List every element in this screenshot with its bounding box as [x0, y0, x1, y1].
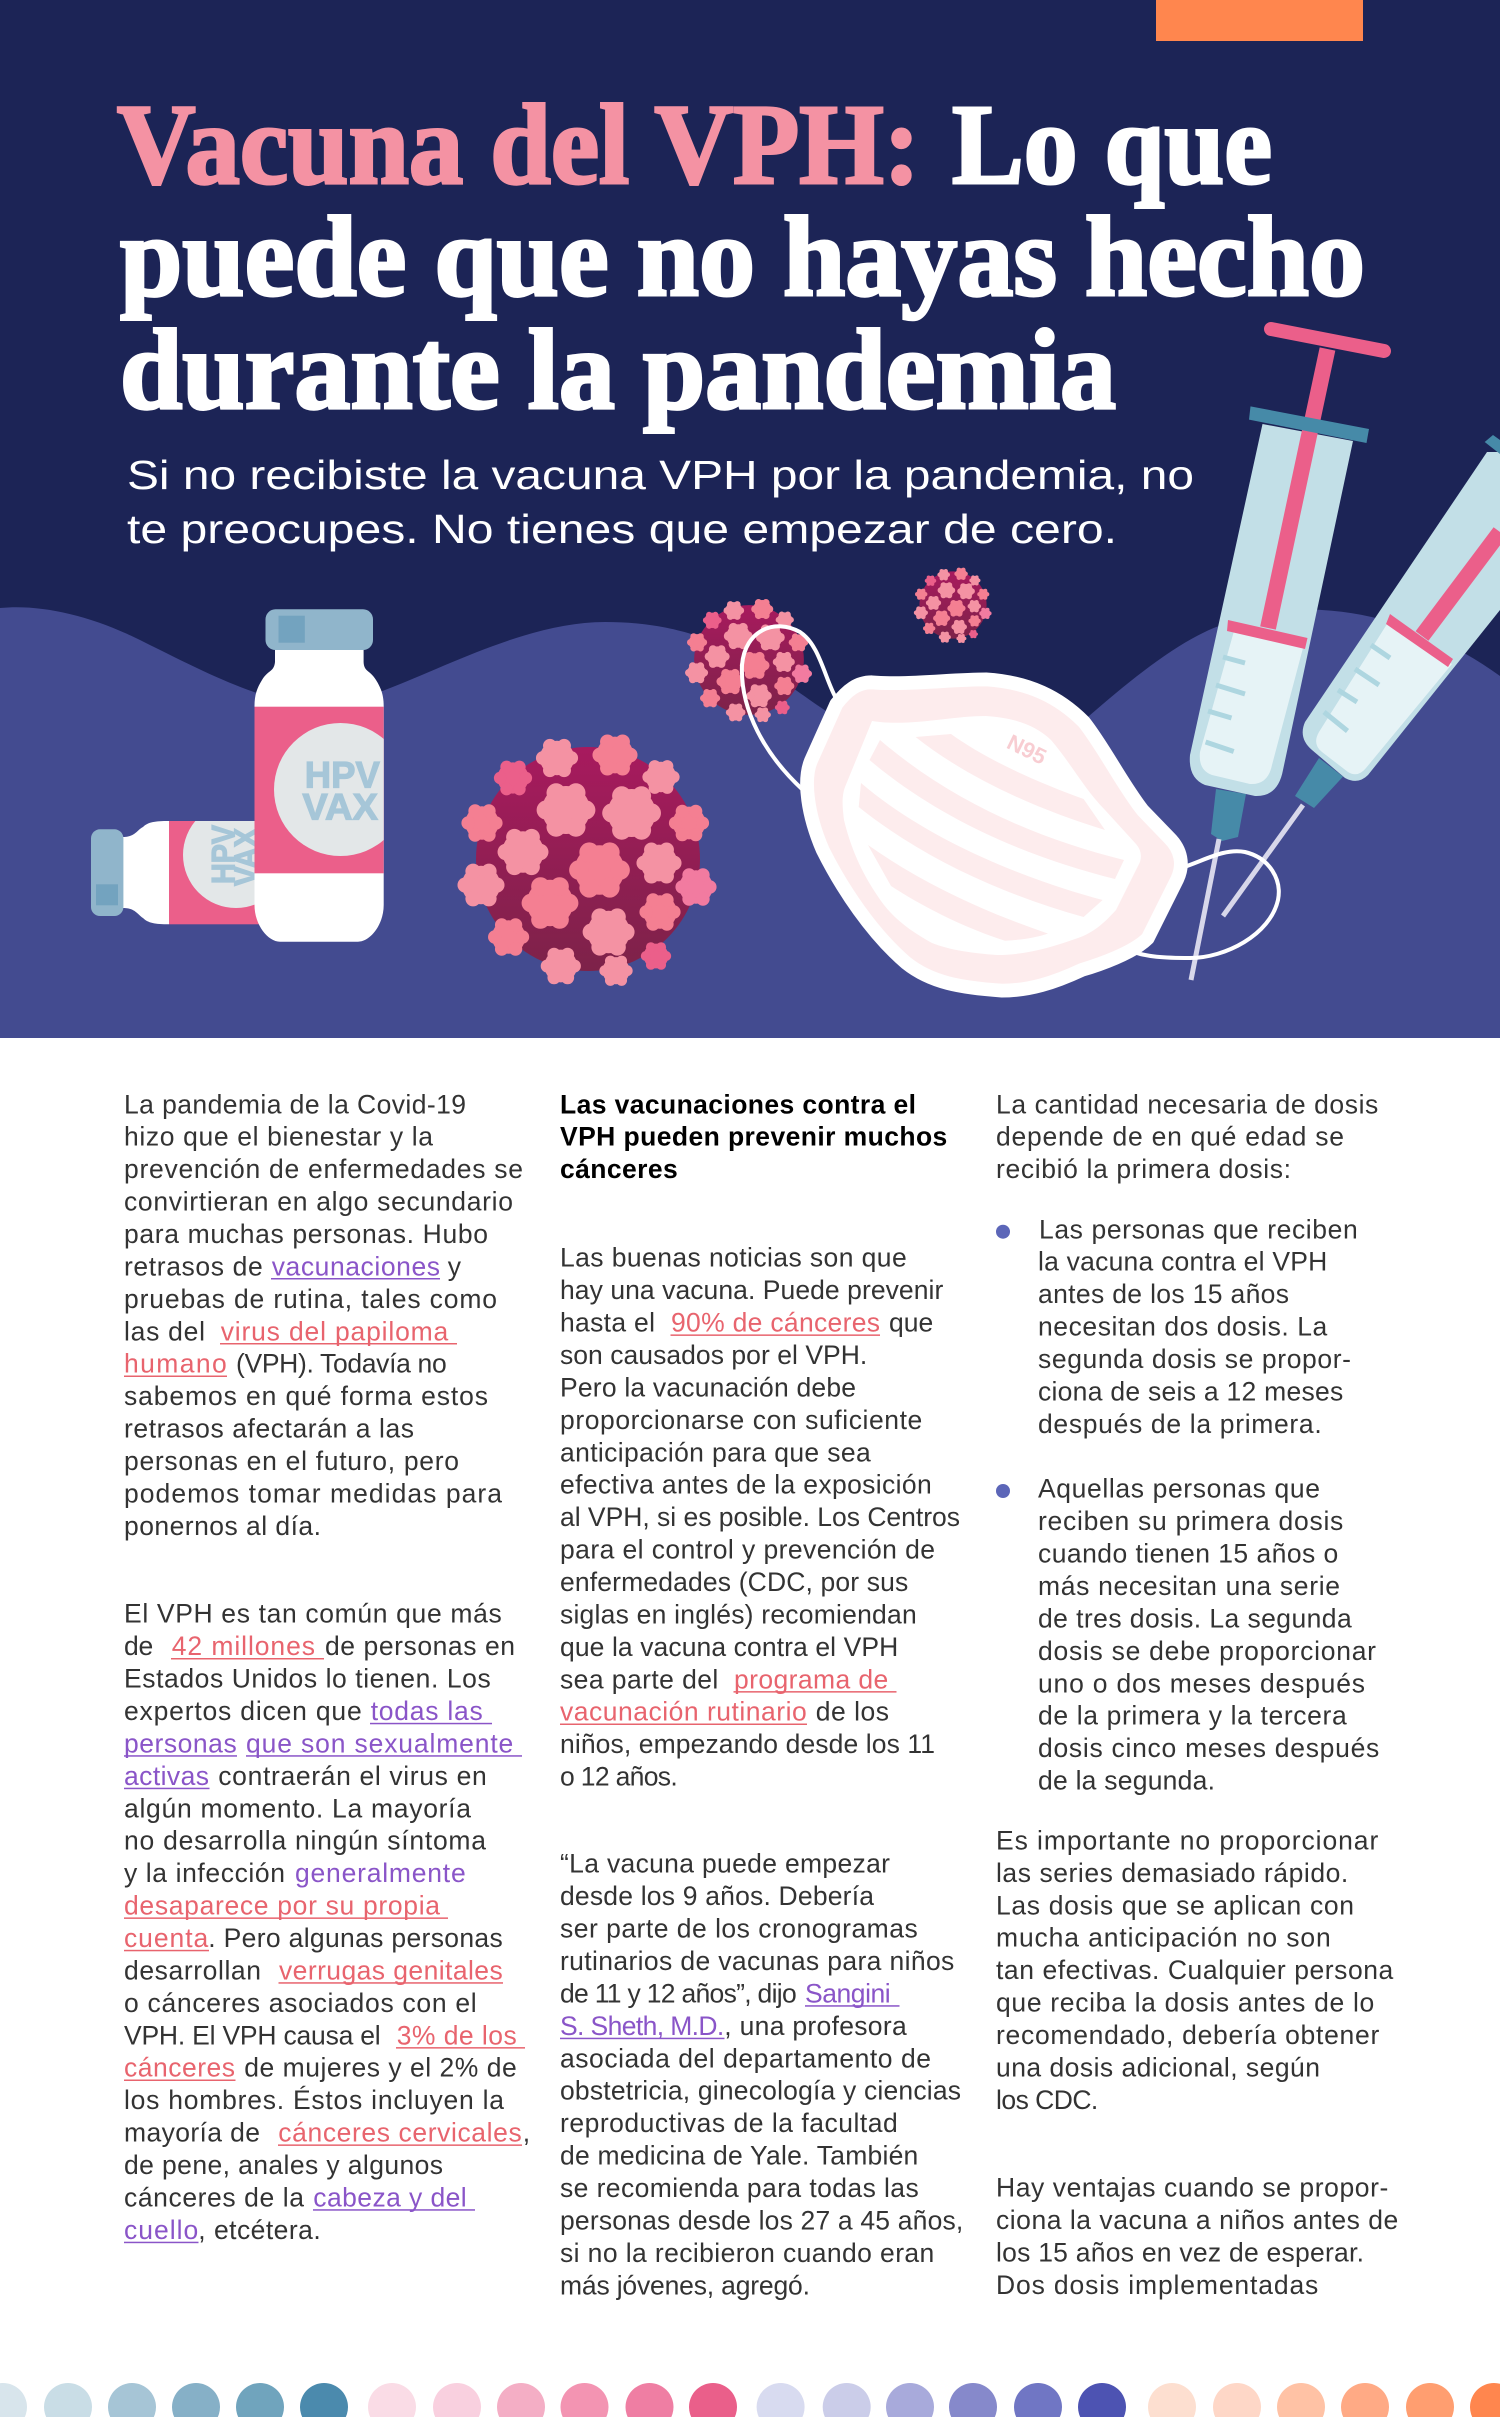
text block: column two good news: efectiva antes de la exposición [560, 1470, 932, 1500]
bullet: under 15 years: segunda dosis se propor- [1038, 1344, 1351, 1374]
text block: column two quote: reproductivas de la facultad [560, 2108, 898, 2138]
text block: column one intro: personas en el futuro, pero [124, 1446, 459, 1476]
text block: column three intro [996, 1089, 1378, 1184]
icon: small virus [914, 568, 992, 643]
text block: column two good news: o 12 años. [560, 1762, 678, 1792]
text block: column two good news: vacunación rutinario [560, 1697, 807, 1727]
text block: column three intro: La cantidad necesaria de dosis [996, 1089, 1378, 1119]
text block: column two good news: son causados por el VPH. [560, 1340, 867, 1370]
text block: column two good news: sea parte del [560, 1664, 718, 1694]
text block: column one VPH prevalence: expertos dicen que [124, 1696, 362, 1726]
text block: column two good news: enfermedades (CDC, por sus [560, 1567, 908, 1597]
text block: column two good news: al VPH, si es posible. Los Centros [560, 1502, 960, 1532]
text block: column two good news: Las buenas noticias son que [560, 1243, 907, 1273]
text block: column three advantages: Hay ventajas cuando se propor- [996, 2173, 1388, 2203]
text block: column two quote: de medicina de Yale. También [560, 2141, 918, 2171]
title: Lo que [952, 81, 1272, 208]
text block: column two quote: Sangini [805, 1978, 891, 2008]
bullet: 15 years or older: uno o dos meses después [1038, 1668, 1365, 1698]
text block: column three timing: una dosis adicional, según [996, 2052, 1320, 2082]
text block: column one VPH prevalence: mayoría de [124, 2118, 260, 2148]
title [117, 81, 1365, 433]
text block: column one VPH prevalence: cuello [124, 2215, 198, 2245]
bullet: 15 years or older: de tres dosis. La segunda [1038, 1603, 1352, 1633]
text block: column two good news: niños, empezando desde los 11 [560, 1729, 935, 1759]
text block: column one VPH prevalence: y la infección [124, 1858, 285, 1888]
text block: column two quote: se recomienda para todas las [560, 2173, 919, 2203]
heading: column two [560, 1089, 947, 1184]
text block: column one intro: La pandemia de la Covid-19 [124, 1089, 466, 1119]
bullet: under 15 years [996, 1214, 1358, 1439]
text block: column three intro: recibió la primera dosis: [996, 1154, 1291, 1184]
text block: column two quote: obstetricia, ginecología y ciencias [560, 2076, 961, 2106]
text block: column one intro: y [448, 1252, 462, 1282]
text block: column one intro: ponernos al día. [124, 1511, 321, 1541]
text block: column three timing: tan efectivas. Cualquier persona [996, 1955, 1394, 1985]
bullet: 15 years or older: dosis se debe proporcionar [1038, 1636, 1376, 1666]
icon: medium virus [685, 599, 812, 722]
text block: column three advantages [996, 2173, 1398, 2300]
heading: column two: Las vacunaciones contra el [560, 1089, 916, 1119]
subtitle [127, 452, 1194, 552]
text block: column one intro: retrasos de [124, 1252, 263, 1282]
subtitle: te preocupes. No tienes que empezar de cero. [127, 506, 1117, 552]
text block: column three timing: las series demasiado rápido. [996, 1858, 1348, 1888]
text block: column one VPH prevalence: los hombres. Éstos incluyen la [124, 2085, 504, 2115]
text block: column two good news: anticipación para que sea [560, 1437, 871, 1467]
text block: column three timing: mucha anticipación no son [996, 1923, 1331, 1953]
title: puede que no hayas hecho [120, 193, 1365, 320]
icon: N95 mask [742, 626, 1279, 991]
text block: column one VPH prevalence: que son sexualmente [246, 1728, 513, 1758]
text block: column one VPH prevalence: no desarrolla ningún síntoma [124, 1826, 486, 1856]
bullet: under 15 years: necesitan dos dosis. La [1038, 1312, 1328, 1342]
text block: column one VPH prevalence: verrugas genitales [279, 1955, 503, 1985]
text block: column two quote: desde los 9 años. Debería [560, 1881, 874, 1911]
text block: column two quote: asociada del departamento de [560, 2043, 931, 2073]
text block: column two good news: que la vacuna contra el VPH [560, 1632, 898, 1662]
text block: column one intro: vacunaciones [272, 1252, 440, 1282]
icon: large vial [254, 609, 384, 942]
bullet: 15 years or older: más necesitan una serie [1038, 1571, 1340, 1601]
text block: column three timing: Es importante no proporcionar [996, 1825, 1378, 1855]
text block: column one VPH prevalence: . Pero algunas personas [208, 1923, 503, 1953]
text block: column two good news: hasta el [560, 1308, 655, 1338]
bullet: under 15 years: Las personas que reciben [1039, 1214, 1358, 1244]
text block: column one VPH prevalence: VPH. El VPH causa el [124, 2020, 381, 2050]
text block: column one VPH prevalence: todas las [371, 1696, 483, 1726]
text block: column one intro: humano [124, 1349, 227, 1379]
icon: small vial lying down: HPV [206, 824, 242, 884]
hero panel background [0, 0, 1500, 1038]
orange tab [1156, 0, 1363, 41]
text block: column one VPH prevalence: cánceres de la [124, 2182, 304, 2212]
subtitle: Si no recibiste la vacuna VPH por la pandemia, no [127, 452, 1194, 498]
text block: column two good news: 90% de cánceres [671, 1308, 880, 1338]
text block: column two quote: S. Sheth, M.D. [560, 2011, 724, 2041]
text block: column one VPH prevalence: 3% de los [397, 2020, 517, 2050]
text block: column one VPH prevalence: activas [124, 1761, 209, 1791]
bullet: 15 years or older: reciben su primera dosis [1038, 1506, 1343, 1536]
text block: column one intro: virus del papiloma [221, 1316, 449, 1346]
text block: column one VPH prevalence: de pene, anales y algunos [124, 2150, 443, 2180]
text block: column two quote: “La vacuna puede empezar [560, 1849, 890, 1879]
icon: large vial: VAX [302, 786, 378, 827]
text block: column two good news: que [889, 1308, 933, 1338]
text block: column three advantages: ciona la vacuna a niños antes de [996, 2205, 1398, 2235]
text block: column one intro: sabemos en qué forma estos [124, 1381, 488, 1411]
text block: column three timing: recomendado, debería obtener [996, 2020, 1379, 2050]
text block: column one intro [124, 1089, 523, 1541]
icon: N95 mask: N95 [1003, 729, 1050, 770]
bullet: 15 years or older: de la primera y la tercera [1038, 1701, 1347, 1731]
text block: column two quote: personas desde los 27 a 45 años, [560, 2205, 963, 2235]
text block: column two good news [560, 1243, 960, 1792]
bottom colour dots [0, 2383, 1500, 2417]
text block: column one VPH prevalence [124, 1599, 530, 2245]
text block: column one VPH prevalence: desarrollan [124, 1955, 261, 1985]
text block: column two good news: Pero la vacunación debe [560, 1372, 856, 1402]
text block: column three timing: Las dosis que se aplican con [996, 1890, 1354, 1920]
text block: column two good news: programa de [734, 1664, 888, 1694]
heading: column two: cánceres [560, 1154, 678, 1184]
text block: column one VPH prevalence: cánceres cervicales [278, 2118, 522, 2148]
text block: column two quote: ser parte de los cronogramas [560, 1914, 918, 1944]
text block: column one intro: convirtieran en algo secundario [124, 1187, 513, 1217]
bullet: under 15 years: la vacuna contra el VPH [1038, 1247, 1327, 1277]
text block: column two quote: , una profesora [724, 2011, 907, 2041]
text block: column one VPH prevalence: de [124, 1631, 153, 1661]
text block: column one VPH prevalence: contraerán el virus en [218, 1761, 487, 1791]
text block: column one intro: (VPH). Todavía no [236, 1349, 447, 1379]
text block: column two quote [560, 1849, 963, 2300]
text block: column two quote: de 11 y 12 años”, dijo [560, 1978, 797, 2008]
text block: column three advantages: los 15 años en vez de esperar. [996, 2238, 1364, 2268]
title: Vacuna del VPH: [117, 81, 920, 208]
icon: syringe two [1223, 435, 1500, 916]
icon: small vial lying down [91, 821, 259, 924]
text block: column two quote: más jóvenes, agregó. [560, 2270, 810, 2300]
bullet: 15 years or older [996, 1474, 1379, 1796]
heading: column two: VPH pueden prevenir muchos [560, 1122, 947, 1152]
text block: column one intro: pruebas de rutina, tales como [124, 1284, 497, 1314]
text block: column one VPH prevalence: personas [124, 1728, 237, 1758]
text block: column two quote: rutinarios de vacunas para niños [560, 1946, 954, 1976]
text block: column one VPH prevalence: cánceres [124, 2053, 235, 2083]
text block: column three intro: depende de en qué edad se [996, 1122, 1344, 1152]
text block: column two good news: siglas en inglés) recomiendan [560, 1599, 917, 1629]
bullet: 15 years or older: de la segunda. [1038, 1766, 1215, 1796]
text block: column one VPH prevalence: cabeza y del [313, 2182, 467, 2212]
text block: column one intro: para muchas personas. Hubo [124, 1219, 488, 1249]
bullet: under 15 years: ciona de seis a 12 meses [1038, 1376, 1343, 1406]
text block: column one VPH prevalence: 42 millones [172, 1631, 315, 1661]
icon: syringe one [1190, 329, 1384, 980]
text block: column one VPH prevalence: de mujeres y el 2% de [244, 2053, 517, 2083]
text block: column one VPH prevalence: generalmente [295, 1858, 466, 1888]
text block: column one VPH prevalence: desaparece por su propia [124, 1891, 440, 1921]
bullet: 15 years or older: Aquellas personas que [1038, 1474, 1320, 1504]
text block: column one intro: hizo que el bienestar y la [124, 1122, 433, 1152]
text block: column one VPH prevalence: El VPH es tan común que más [124, 1599, 502, 1629]
text block: column two good news: para el control y prevención de [560, 1535, 935, 1565]
text block: column two good news: proporcionarse con suficiente [560, 1405, 922, 1435]
text block: column one VPH prevalence: , [523, 2118, 530, 2148]
text block: column three advantages: Dos dosis implementadas [996, 2270, 1318, 2300]
bullet: under 15 years: antes de los 15 años [1038, 1279, 1289, 1309]
text block: column two good news: hay una vacuna. Puede prevenir [560, 1275, 943, 1305]
icon: large vial: HPV [305, 754, 380, 795]
text block: column one VPH prevalence: cuenta [124, 1923, 209, 1953]
icon: small vial lying down: VAX [228, 827, 264, 886]
text block: column one intro: retrasos afectarán a las [124, 1414, 414, 1444]
text block: column three timing [996, 1825, 1394, 2115]
text block: column one VPH prevalence: algún momento. La mayoría [124, 1793, 471, 1823]
title: durante la pandemia [120, 306, 1116, 433]
text block: column one VPH prevalence: , etcétera. [198, 2215, 321, 2245]
text block: column one VPH prevalence: de personas en [325, 1631, 515, 1661]
text block: column one VPH prevalence: o cánceres asociados con el [124, 1988, 477, 2018]
text block: column one VPH prevalence: Estados Unidos lo tienen. Los [124, 1664, 491, 1694]
text block: column one intro: las del [124, 1316, 205, 1346]
text block: column three timing: que reciba la dosis antes de lo [996, 1988, 1374, 2018]
icon: large virus [457, 735, 717, 986]
bullet: under 15 years: después de la primera. [1038, 1409, 1322, 1439]
bullet: 15 years or older: cuando tienen 15 años o [1038, 1539, 1338, 1569]
wave background [0, 607, 1500, 1038]
bullet: 15 years or older: dosis cinco meses después [1038, 1733, 1379, 1763]
text block: column three timing: los CDC. [996, 2085, 1098, 2115]
text block: column one intro: podemos tomar medidas para [124, 1478, 502, 1508]
text block: column one intro: prevención de enfermedades se [124, 1154, 523, 1184]
text block: column two quote: si no la recibieron cuando eran [560, 2238, 934, 2268]
text block: column two good news: de los [816, 1697, 889, 1727]
